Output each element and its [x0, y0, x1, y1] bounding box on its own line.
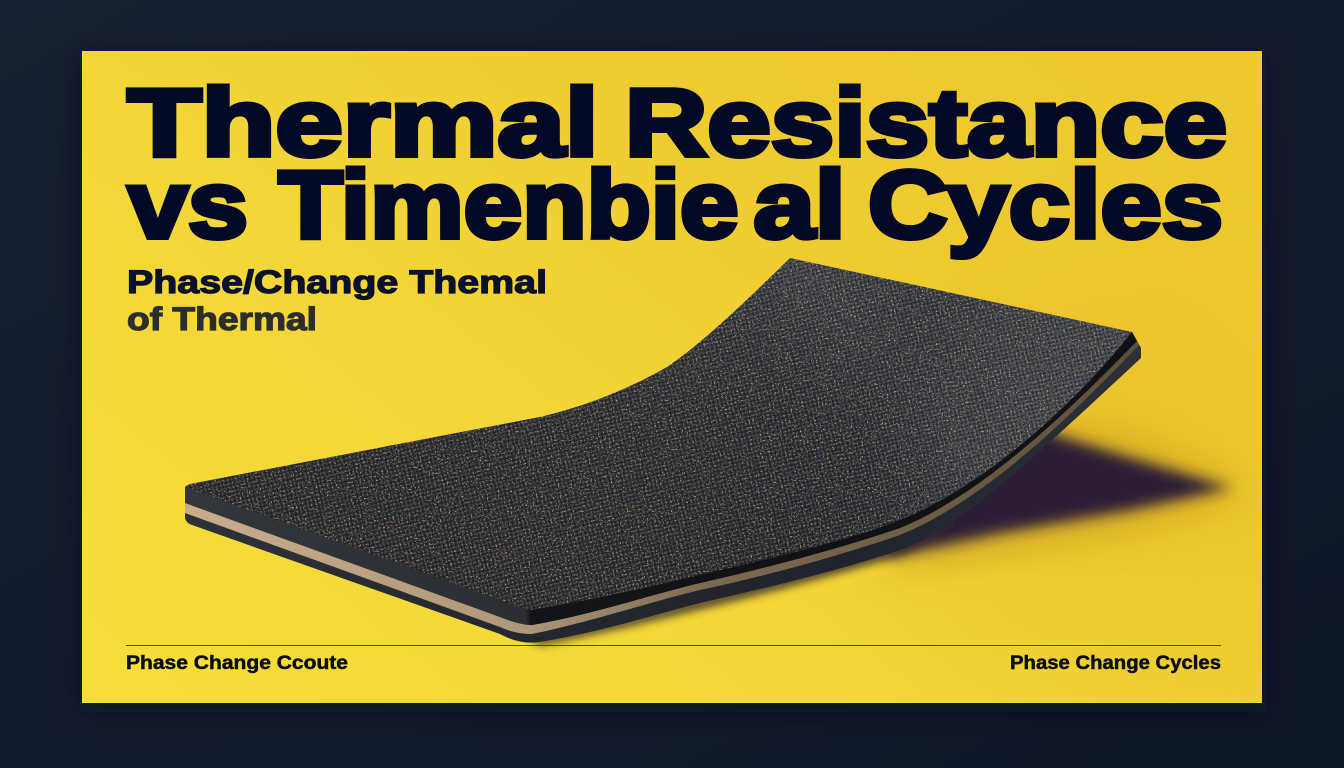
- subtitle: Phase/Change Themal: [127, 264, 547, 300]
- footer divider line: [126, 645, 1221, 646]
- panel: yellow card: [82, 51, 1262, 703]
- cast shadow: [530, 425, 1250, 646]
- subtitle: [127, 264, 547, 337]
- panel shadow: [80, 58, 1266, 712]
- footer label left: Phase Change Ccoute: [126, 653, 348, 674]
- pad shading: [185, 258, 1132, 610]
- pad tan core layer: [185, 341, 1139, 634]
- title: Resistance: [625, 70, 1227, 176]
- pad weave texture: [185, 258, 1132, 610]
- title: Timenbie: [278, 152, 738, 258]
- pad bottom layer: [185, 332, 1141, 643]
- title: Thermal: [128, 70, 598, 176]
- title: Cycles: [868, 152, 1223, 258]
- pad speckle texture: [180, 255, 1140, 615]
- pad top layer edge: [185, 332, 1137, 625]
- subtitle: of Thermal: [127, 301, 317, 337]
- title: al: [754, 152, 846, 258]
- title: [128, 70, 1227, 258]
- footer label right: Phase Change Cycles: [1010, 653, 1221, 674]
- pad top surface: [185, 258, 1132, 610]
- title: vs: [128, 152, 248, 258]
- thermal pad illustration: [180, 255, 1141, 643]
